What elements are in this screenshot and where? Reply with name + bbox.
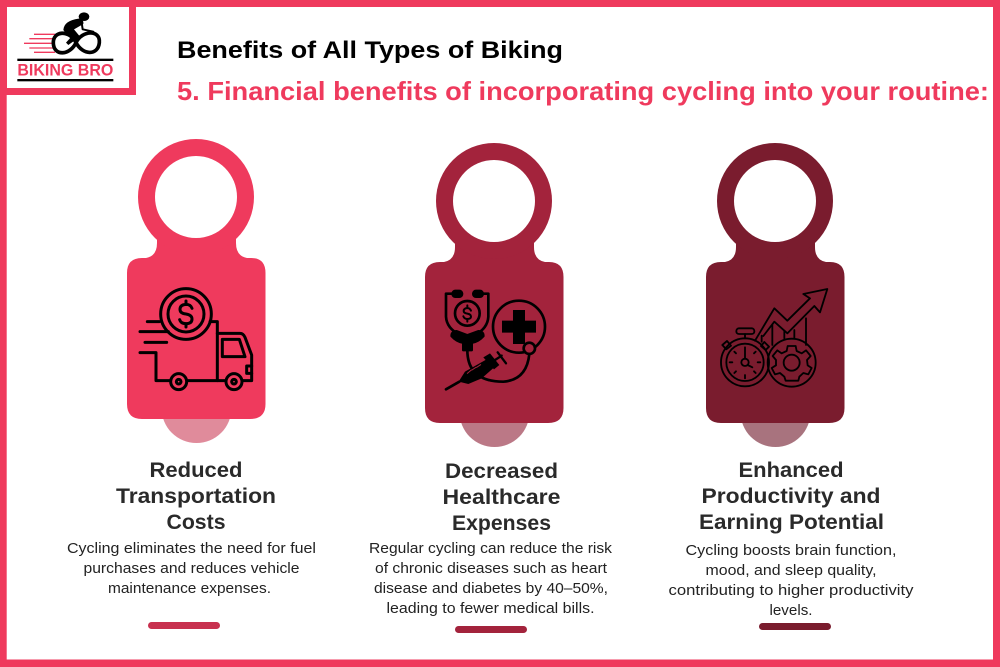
panel: decreased healthcare expenses [369, 143, 613, 633]
heading: Expenses [452, 511, 551, 535]
description: Cycling eliminates the need for fuel [67, 540, 316, 557]
panel: enhanced productivity and earning potential [668, 143, 914, 630]
description: leading to fewer medical bills. [386, 600, 594, 617]
icon: delivery truck with dollar coin [140, 289, 252, 390]
tag shape 1 [127, 139, 266, 443]
tag shape 3 [706, 143, 844, 447]
title: Benefits of All Types of Biking [177, 37, 563, 64]
heading [442, 459, 561, 535]
accent bar [455, 626, 527, 633]
heading [116, 458, 276, 534]
heading: Reduced [150, 458, 242, 482]
heading: Decreased [445, 459, 558, 483]
description: Cycling boosts brain function, [686, 542, 896, 559]
heading: Earning Potential [699, 510, 884, 534]
description: contributing to higher productivity [668, 582, 914, 599]
icon: stopwatch, gear and rising arrow [721, 289, 827, 387]
description: of chronic diseases such as heart [375, 560, 608, 577]
accent bar [759, 623, 831, 630]
description: disease and diabetes by 40–50%, [374, 580, 608, 597]
subtitle: 5. Financial benefits of incorporating cycling into your routine: [177, 76, 989, 106]
tag shape 2 [425, 143, 564, 447]
heading: Transportation [116, 484, 276, 508]
description: mood, and sleep quality, [706, 562, 876, 579]
logo rider [53, 12, 99, 53]
heading [699, 458, 884, 534]
icon: stethoscope, medical cross and syringe [446, 291, 545, 389]
logo speed lines [24, 34, 55, 52]
description [668, 542, 914, 619]
heading: Healthcare [442, 485, 561, 509]
description: purchases and reduces vehicle [84, 560, 300, 577]
heading: Costs [166, 510, 226, 534]
description: levels. [770, 602, 812, 619]
description [369, 540, 613, 617]
description: maintenance expenses. [108, 580, 271, 597]
accent bar [148, 622, 220, 629]
description [67, 540, 316, 597]
logo wordmark: BIKING BRO [17, 61, 113, 80]
heading: Productivity and [702, 484, 880, 508]
description: Regular cycling can reduce the risk [369, 540, 613, 557]
logo: Biking Bro [0, 0, 136, 95]
heading: Enhanced [738, 458, 844, 482]
panel: reduced transportation costs [67, 139, 316, 629]
